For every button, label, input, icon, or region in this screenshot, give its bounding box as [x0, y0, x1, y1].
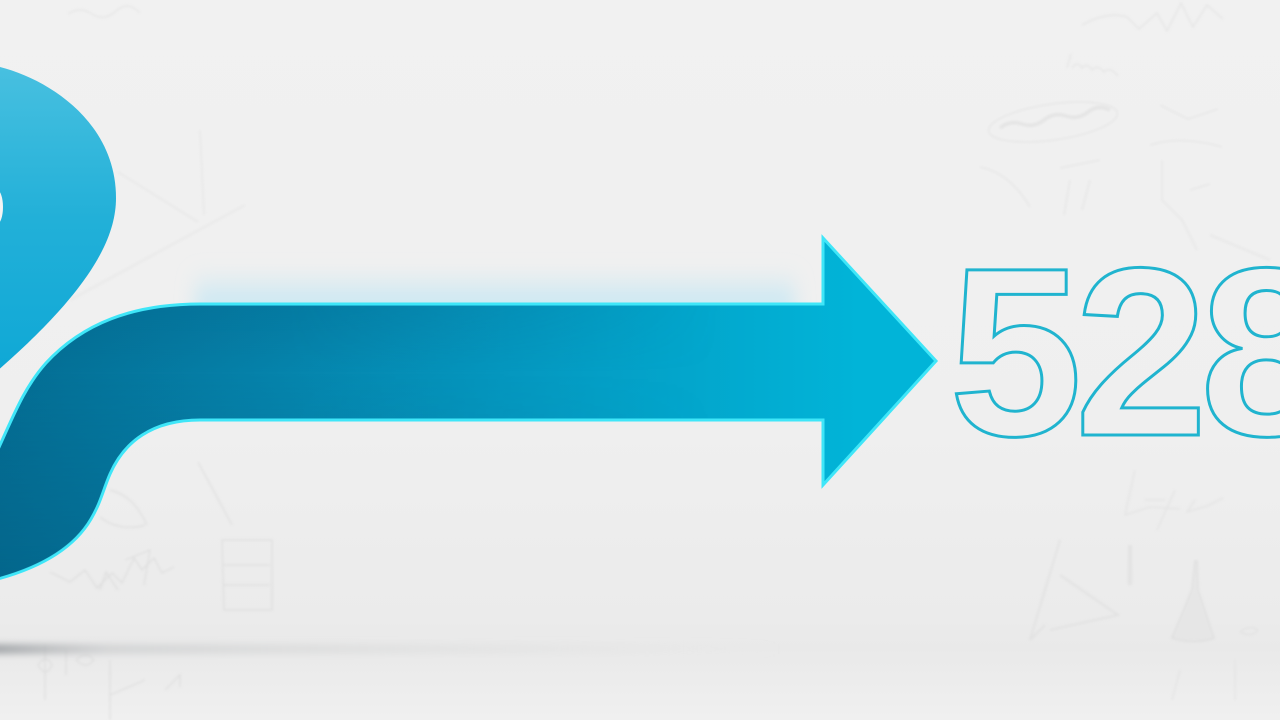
- floor shadow: [0, 644, 780, 654]
- background sketches: left: [38, 6, 272, 720]
- arrow vertical shading: [0, 306, 518, 577]
- background sketches: right: [980, 3, 1270, 700]
- upper curved ribbon: [0, 66, 116, 372]
- small white notch: [0, 190, 3, 224]
- glow above arrow shaft: [195, 268, 795, 312]
- main arrow: [0, 238, 936, 580]
